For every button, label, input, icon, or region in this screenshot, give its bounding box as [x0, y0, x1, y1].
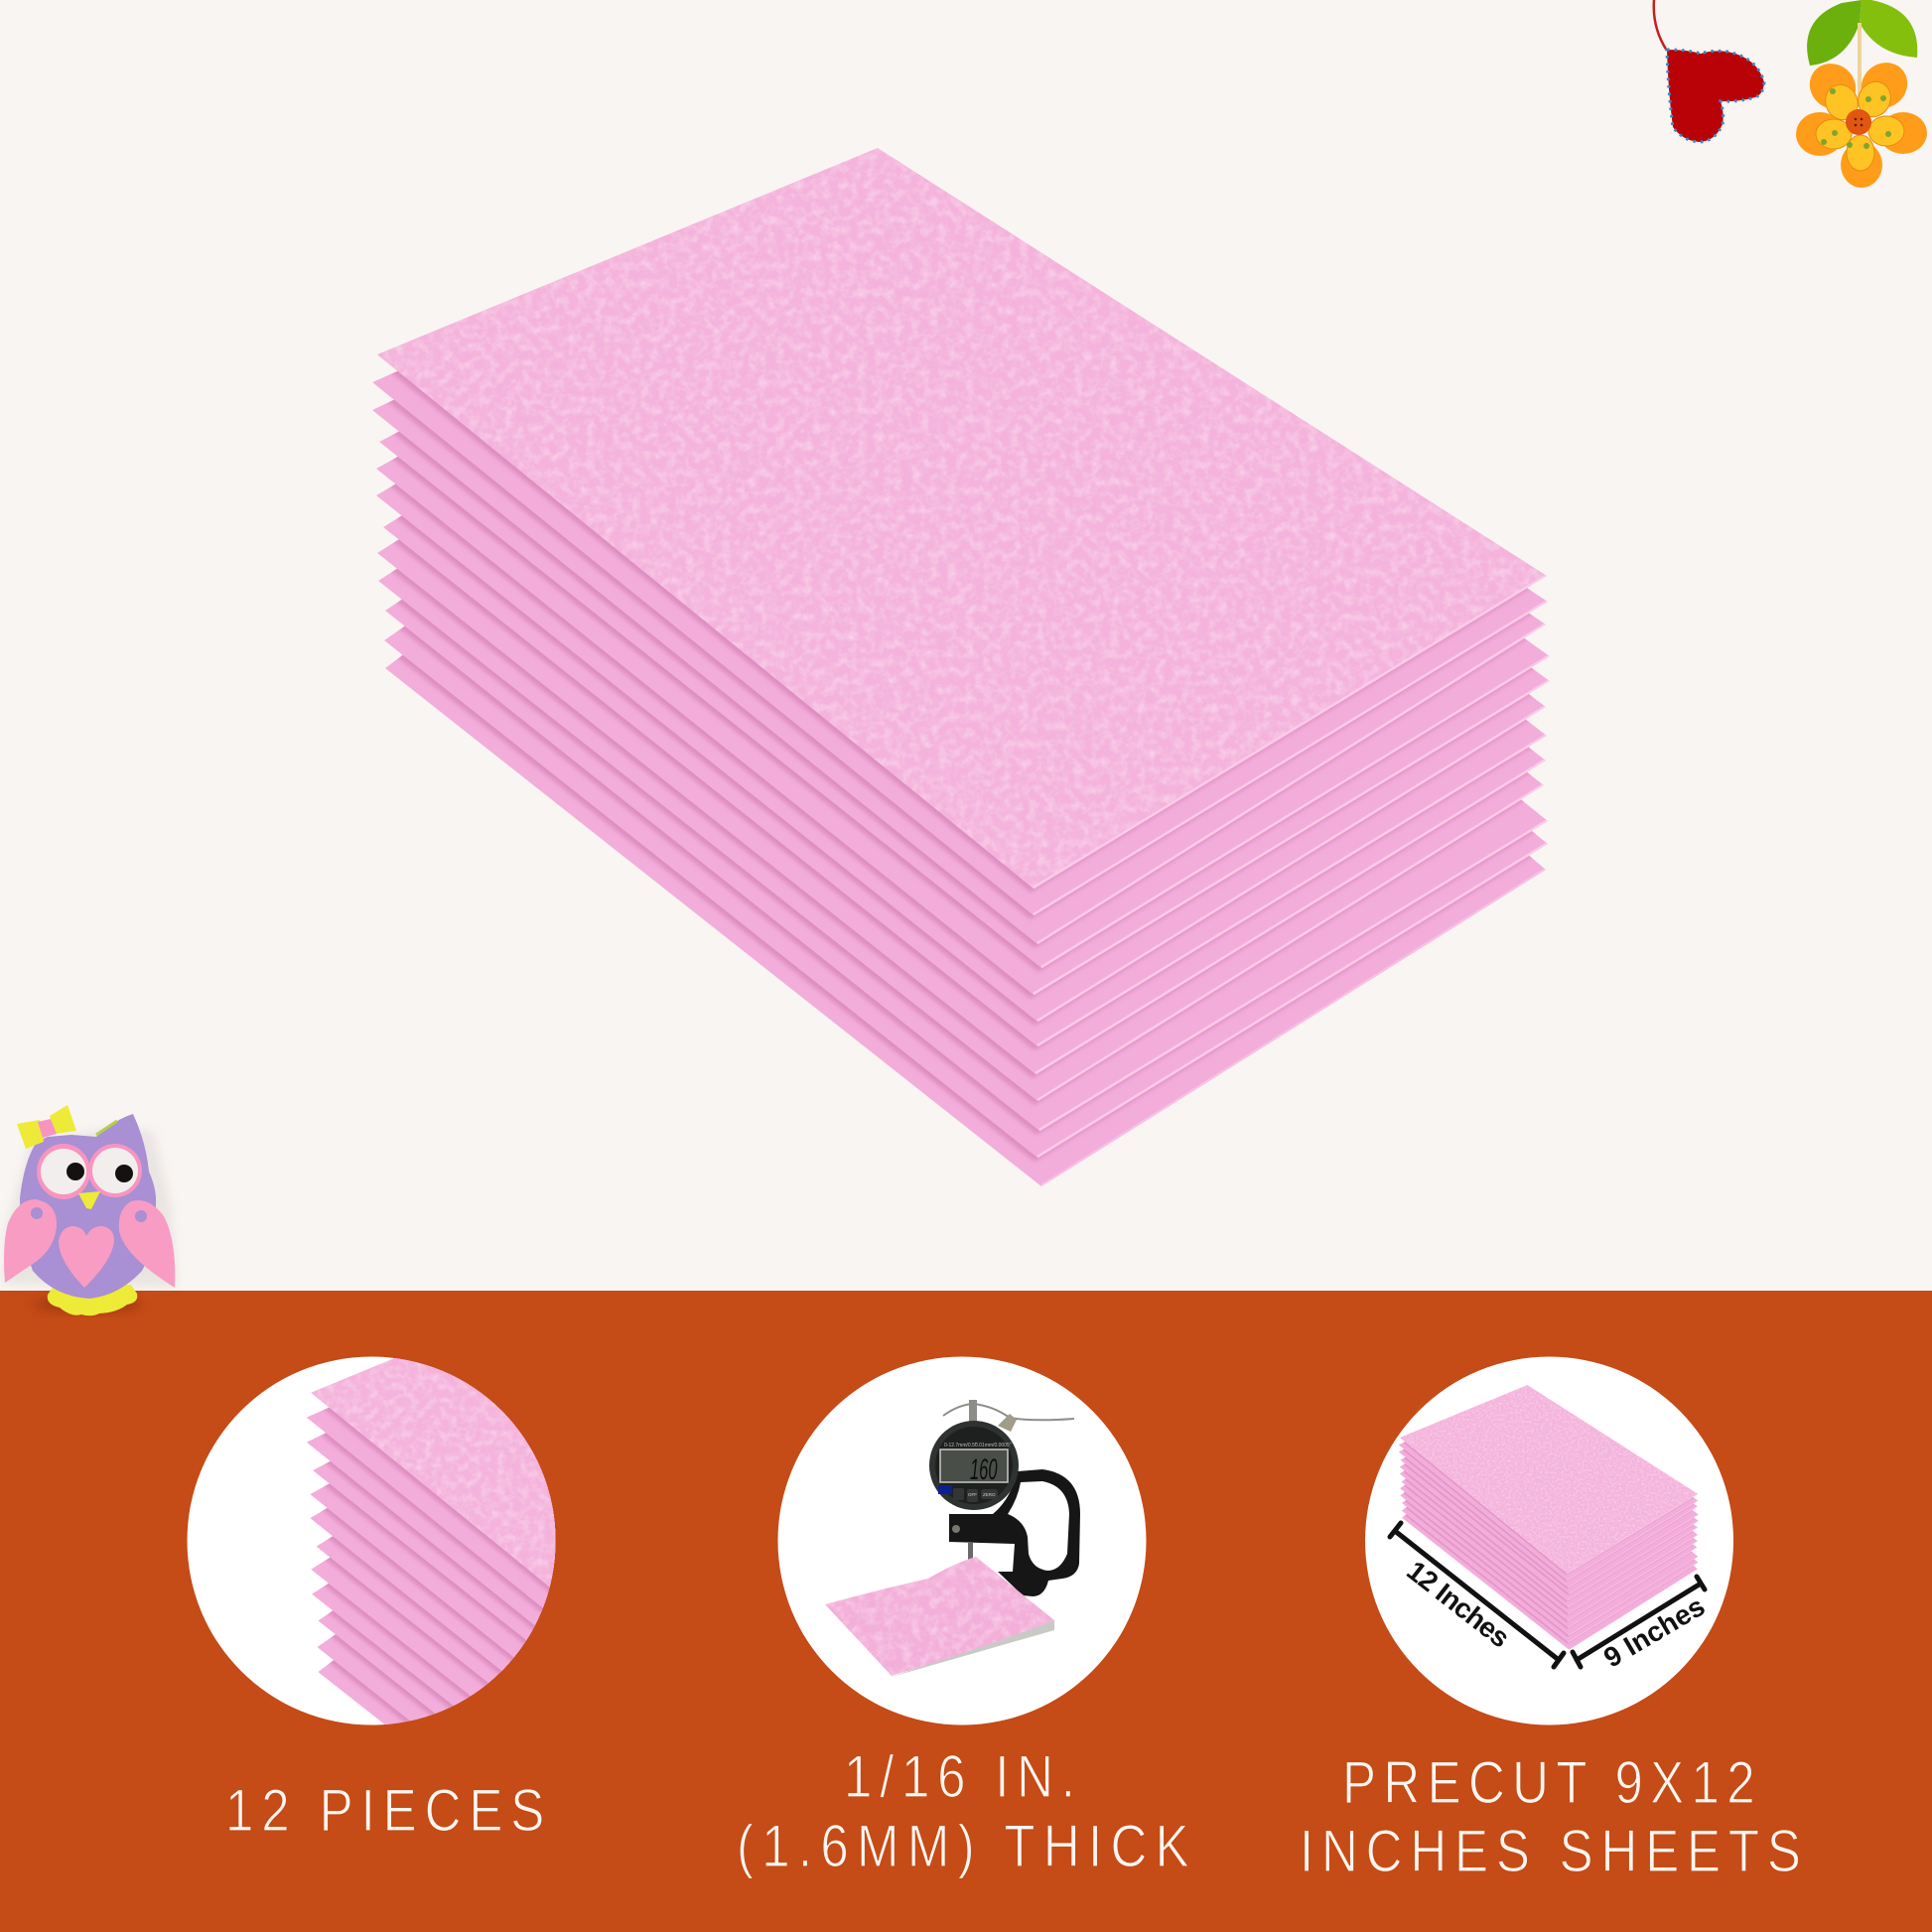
owl wings	[4, 1199, 175, 1288]
label: 12 pieces: 12 PIECES	[225, 1777, 544, 1844]
stack thumbnail	[1399, 1385, 1699, 1650]
orange petals	[1796, 54, 1927, 188]
panel: 12 pieces	[187, 1356, 556, 1831]
icon: felt owl	[3, 1105, 177, 1315]
owl heart	[59, 1226, 114, 1288]
icon: digital thickness gauge: OFF	[968, 1492, 977, 1497]
icon: digital thickness gauge: 0.01mm/0.0005"	[975, 1443, 1012, 1449]
dimension line: 12 inches: 12 Inches	[1401, 1555, 1516, 1654]
panel: thickness	[737, 1356, 1189, 1879]
label: thickness: (1.6MM) THICK	[737, 1813, 1189, 1879]
label: precut size	[1300, 1749, 1801, 1884]
owl bow	[17, 1105, 76, 1149]
hero image: stack of pink felt sheets	[372, 148, 1550, 1186]
icon: felt flower with green leaves	[1796, 0, 1927, 188]
dimension line: 9 inches	[1573, 1577, 1710, 1673]
icon: digital thickness gauge: ZERO	[983, 1492, 996, 1497]
photo circle background	[1365, 1356, 1733, 1725]
icon: digital thickness gauge: 0-12.7mm/0.5"	[944, 1443, 977, 1449]
felt sample sheet	[825, 1557, 1054, 1677]
dimension line: 12 inches	[1390, 1523, 1564, 1667]
dimension line: 9 inches: 9 Inches	[1598, 1590, 1710, 1673]
label: precut size: PRECUT 9X12	[1342, 1749, 1755, 1816]
orange feature band	[0, 1291, 1932, 1932]
gauge reading: 160	[970, 1453, 998, 1486]
owl eyes	[37, 1144, 142, 1199]
panel: precut size	[1300, 1356, 1801, 1884]
label: thickness	[737, 1743, 1189, 1879]
icon: red felt heart ornament	[1654, 0, 1764, 142]
photo circle: sheet edges close-up	[187, 1356, 556, 1725]
photo circle background	[778, 1356, 1146, 1725]
label: precut size: INCHES SHEETS	[1300, 1818, 1801, 1884]
label: thickness: 1/16 IN.	[844, 1743, 1075, 1810]
yellow patterned petals	[1816, 76, 1904, 171]
icon: digital thickness gauge	[929, 1400, 1080, 1596]
